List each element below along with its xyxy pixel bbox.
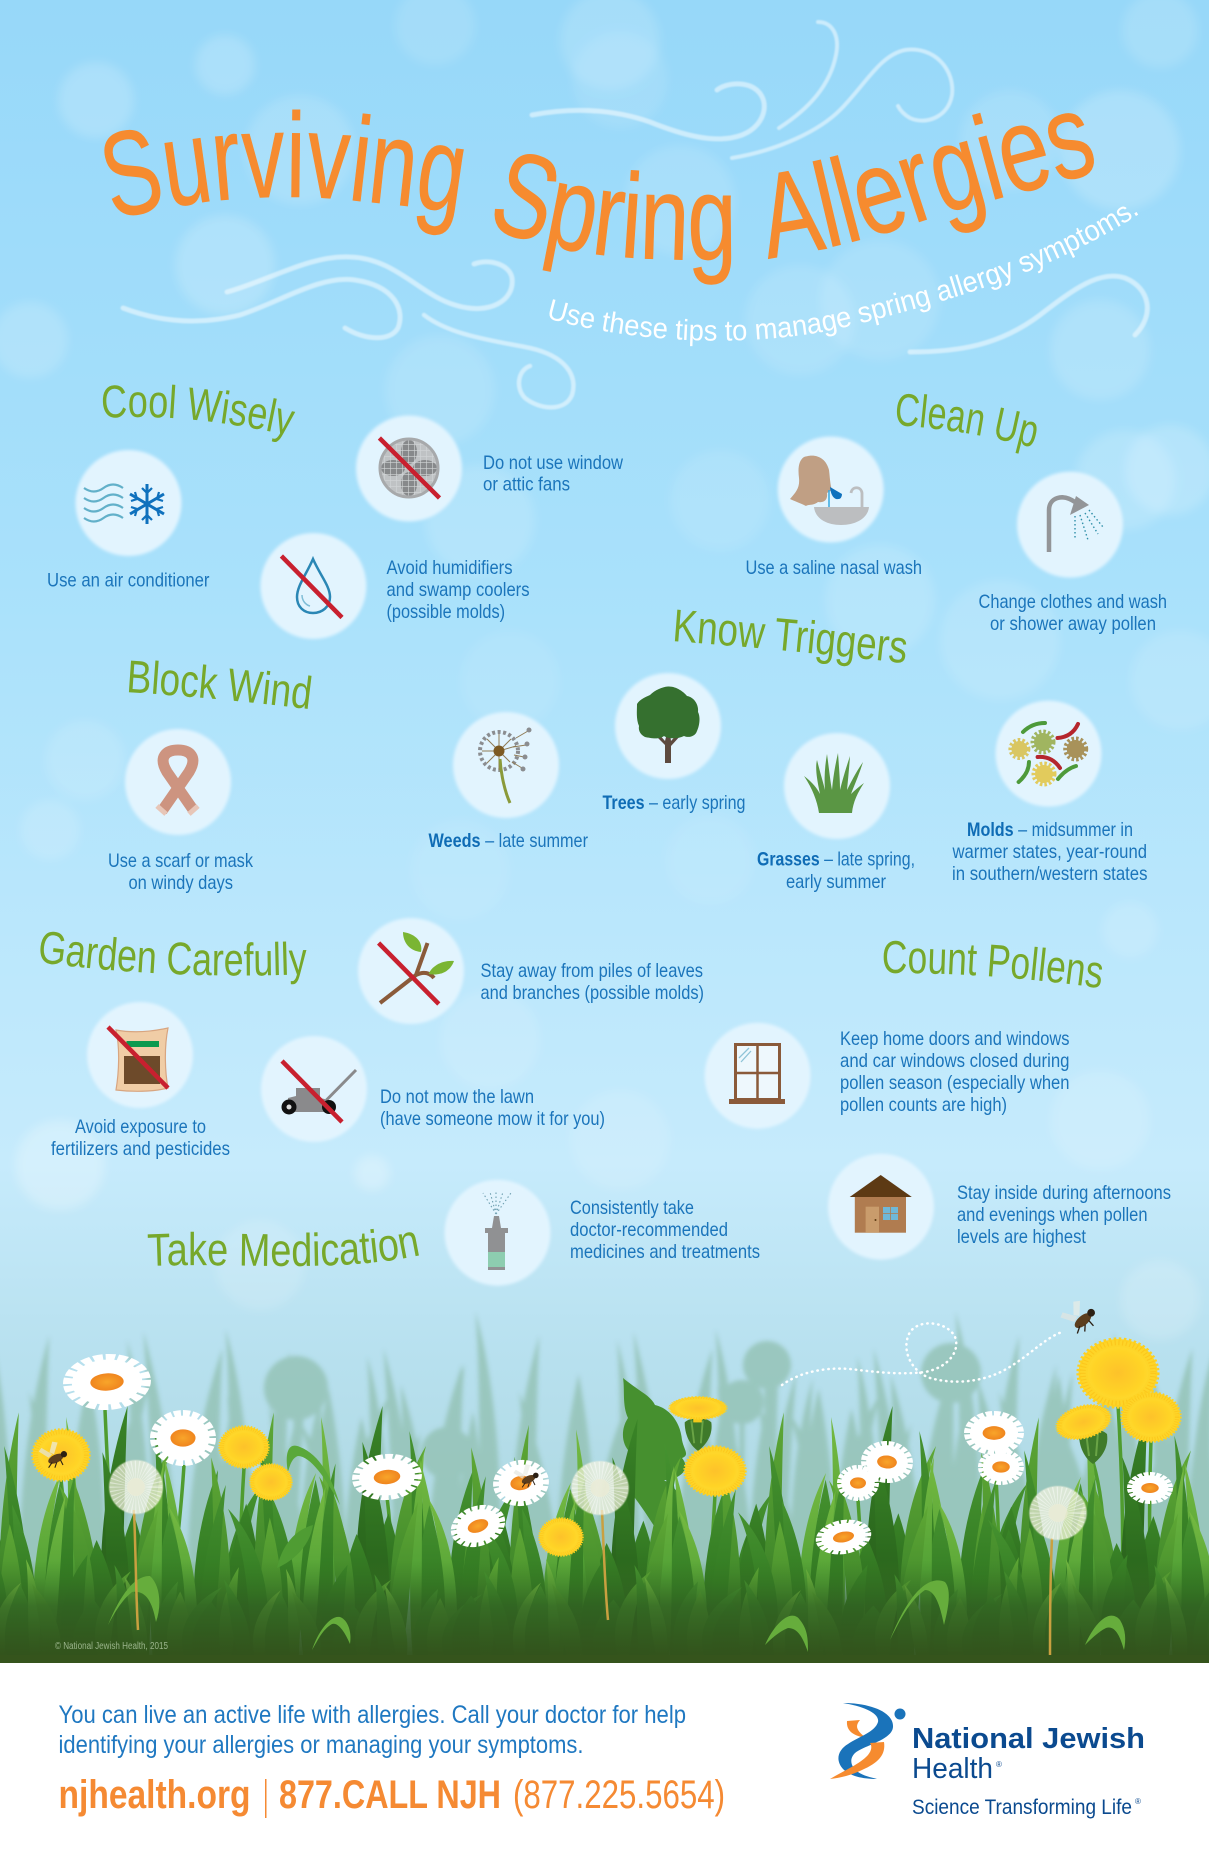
icon: no mowing xyxy=(261,1036,367,1142)
icon: no humidifiers xyxy=(260,533,366,639)
curled leaves xyxy=(108,1446,1125,1652)
footer contact: njhealth.org xyxy=(58,1773,250,1817)
icon: tree xyxy=(615,673,721,779)
text: window: pollen counts are high) xyxy=(840,1094,1007,1116)
title: Surviving xyxy=(104,110,464,236)
text: air conditioner: Use an air conditioner xyxy=(47,570,210,592)
text: leaf piles: Stay away from piles of leaves xyxy=(480,960,703,982)
heading: take medication: Take Medication xyxy=(148,1228,419,1266)
title: Allergies xyxy=(768,112,1094,260)
daisies xyxy=(71,1358,1168,1554)
logo: national jewish health: ® xyxy=(996,1760,1002,1769)
text: fertilizer: fertilizers and pesticides xyxy=(51,1138,230,1160)
text: weeds: Weeds – late summer xyxy=(428,830,588,852)
logo: national jewish health: Health xyxy=(912,1753,993,1785)
footer contact: (877.225.5654) xyxy=(513,1773,725,1817)
text: window xyxy=(840,1028,1070,1116)
text: window fans: Do not use window xyxy=(483,452,624,474)
text: molds: Molds – midsummer in xyxy=(967,819,1133,841)
panel: count pollens xyxy=(704,940,1171,1261)
text: medication: medicines and treatments xyxy=(570,1241,760,1263)
large dandelion leaf xyxy=(623,1378,686,1540)
text: humidifiers: Avoid humidifiers xyxy=(386,557,513,579)
text: window fans xyxy=(483,452,624,496)
footer message xyxy=(58,1701,686,1759)
panel: know triggers xyxy=(428,610,1148,893)
text: grasses xyxy=(757,848,915,893)
icon: scarf xyxy=(125,729,231,835)
logo: national jewish health: Science Transforming Life xyxy=(912,1796,1132,1819)
text: trees: Trees – early spring xyxy=(602,792,746,814)
bees xyxy=(39,1297,1099,1487)
logo: national jewish health xyxy=(830,1703,1145,1819)
text: house: and evenings when pollen xyxy=(957,1204,1148,1226)
footer message: identifying your allergies or managing your symptoms. xyxy=(58,1731,584,1759)
panel: cool wisely xyxy=(47,384,624,640)
text: medication xyxy=(570,1197,760,1263)
logo: national jewish health: National Jewish xyxy=(912,1723,1145,1755)
meadow scene xyxy=(0,1297,1209,1663)
heading: clean up: Clean Up xyxy=(896,394,1037,454)
footer panel xyxy=(0,1663,1209,1860)
heading: block wind: Block Wind xyxy=(128,660,312,709)
wind swirls xyxy=(123,22,1147,407)
text: window: and car windows closed during xyxy=(840,1050,1070,1072)
text: shower: Change clothes and wash xyxy=(978,591,1167,613)
heading: count pollens xyxy=(884,940,1102,988)
flower stems xyxy=(61,1405,1155,1650)
icon: no leaf piles xyxy=(358,918,464,1024)
footer contact: 877.CALL NJH xyxy=(279,1773,501,1817)
heading: garden carefully: Garden Carefully xyxy=(40,932,306,984)
text: humidifiers xyxy=(386,557,530,623)
text: molds: in southern/western states xyxy=(952,863,1148,885)
text: mowing xyxy=(380,1086,605,1130)
panel: garden carefully xyxy=(40,917,704,1160)
text: leaf piles: and branches (possible molds) xyxy=(480,982,704,1004)
panel: block wind xyxy=(108,660,312,894)
icon: air conditioner xyxy=(76,450,182,556)
text: humidifiers: (possible molds) xyxy=(386,601,505,623)
text: medication: Consistently take xyxy=(570,1197,694,1219)
title xyxy=(104,110,1094,285)
icon: window xyxy=(705,1023,811,1129)
ground band xyxy=(0,1655,1209,1663)
text: leaf piles xyxy=(480,960,704,1004)
text: house xyxy=(957,1182,1171,1248)
puffball stems xyxy=(134,1510,1052,1655)
text: scarf: Use a scarf or mask xyxy=(108,850,253,872)
text: shower xyxy=(978,591,1167,635)
text: scarf xyxy=(108,850,253,894)
heading: count pollens: Count Pollens xyxy=(884,940,1102,988)
panel: take medication xyxy=(148,1179,760,1287)
bokeh background xyxy=(0,0,1209,1340)
text: grasses: Grasses – late spring, xyxy=(757,848,915,870)
icon: dandelion weed xyxy=(453,712,559,818)
icon: shower xyxy=(1017,472,1123,578)
icon: no fans xyxy=(356,416,462,522)
logo: national jewish health: ® xyxy=(1135,1797,1141,1806)
heading: cool wisely: Cool Wisely xyxy=(102,384,296,442)
text: mowing: (have someone mow it for you) xyxy=(380,1108,605,1130)
icon: molds xyxy=(996,701,1102,807)
ground shading xyxy=(0,1560,1209,1662)
text: medication: doctor-recommended xyxy=(570,1219,728,1241)
text: molds: warmer states, year-round xyxy=(952,841,1147,863)
icon: nasal spray xyxy=(444,1180,550,1286)
text: fertilizer: Avoid exposure to xyxy=(75,1116,206,1138)
text: house: Stay inside during afternoons xyxy=(957,1182,1171,1204)
heading: block wind xyxy=(128,660,312,709)
title: Spring xyxy=(494,154,732,285)
heading: take medication xyxy=(148,1228,419,1266)
text: house: levels are highest xyxy=(957,1226,1086,1248)
text: nasal wash: Use a saline nasal wash xyxy=(746,557,922,579)
heading: know triggers: Know Triggers xyxy=(674,610,906,666)
icon: nasal wash xyxy=(778,436,884,542)
subtitle: Use these tips to manage spring allergy symptoms. xyxy=(550,206,1138,346)
text: scarf: on windy days xyxy=(128,872,233,894)
footer message: You can live an active life with allergies. Call your doctor for help xyxy=(58,1701,686,1729)
icon: no fertilizer xyxy=(87,1002,193,1108)
text: window: Keep home doors and windows xyxy=(840,1028,1070,1050)
text: molds xyxy=(952,819,1148,885)
icon: house xyxy=(828,1154,934,1260)
text: grasses: early summer xyxy=(786,871,886,893)
icon: grasses xyxy=(784,733,890,839)
dotted bee flight path xyxy=(782,1323,1062,1385)
footer contact xyxy=(58,1773,725,1818)
text: humidifiers: and swamp coolers xyxy=(386,579,530,601)
panel: clean up xyxy=(746,394,1167,635)
heading: clean up xyxy=(896,394,1072,498)
text: window: pollen season (especially when xyxy=(840,1072,1070,1094)
background faded grass and dandelions xyxy=(0,1312,1209,1662)
text: mowing: Do not mow the lawn xyxy=(380,1086,534,1108)
copyright: © National Jewish Health, 2015 xyxy=(55,1641,168,1652)
puffball dandelions xyxy=(109,1460,1087,1540)
yellow dandelions xyxy=(33,1339,1180,1556)
foreground grass xyxy=(0,1406,1209,1662)
text: fertilizer xyxy=(51,1116,230,1160)
text: window fans: or attic fans xyxy=(483,474,570,496)
text: shower: or shower away pollen xyxy=(990,613,1156,635)
